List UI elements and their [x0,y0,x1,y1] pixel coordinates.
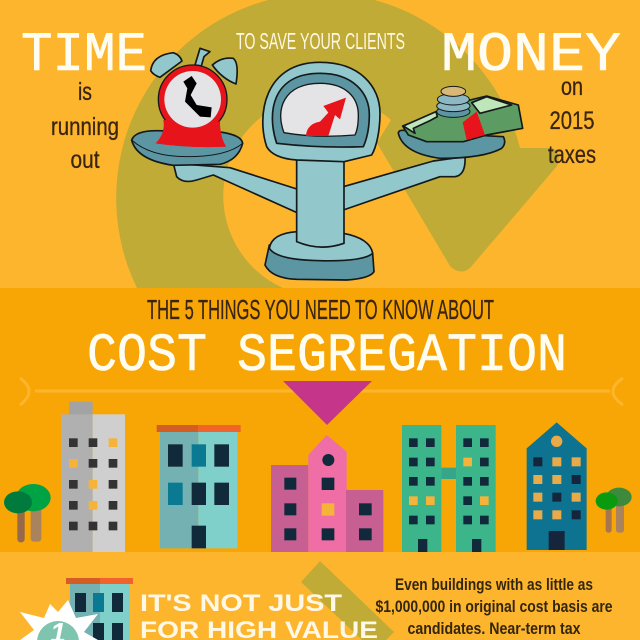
heading: money: MONEY [441,23,621,87]
panel: hero background [0,0,640,288]
bills [403,96,523,142]
scale head [263,62,380,162]
text: on 2015 taxes: 2015 [550,107,594,135]
text: is running out [51,78,119,174]
building icon item 1 [66,578,133,640]
pink building left part [271,435,347,552]
scale base [265,232,374,280]
text: item 1 description: Even buildings with as little as [395,575,593,594]
pointer triangle [283,381,372,425]
grey building [61,402,125,552]
heading: item 1 [140,590,378,640]
text: is running out: is [78,78,92,106]
text: is running out: out [70,146,100,174]
left trees [4,484,51,542]
clock bells [151,48,237,84]
teal building [157,425,241,548]
circular arrow background [116,0,559,288]
scale stem [297,157,344,247]
right trees [596,488,632,533]
text: on 2015 taxes [548,73,596,169]
heading: to save your clients: TO SAVE YOUR CLIENTS [236,28,405,54]
icon: weighing scale with clock and money [132,48,523,280]
clock hands [183,76,212,117]
heading: time: TIME [21,23,147,87]
blue gabled building [527,422,587,550]
coin stack [437,86,470,117]
bill top [403,112,437,133]
text: item 1 description [376,575,612,638]
panel: item 1 background [0,552,640,640]
left pan [132,131,243,165]
scale left arm [173,163,300,214]
clock body [156,65,227,147]
arrow shape behind item 1 [301,561,394,640]
gauge needle [306,98,346,136]
number badge 1 [20,600,98,640]
panel: cost segregation band [0,288,640,552]
red band [463,112,485,140]
clock face [164,71,221,128]
gauge surround [272,73,369,147]
text: item 1 description: candidates. Near-term tax [408,619,581,638]
right buildings and tree [322,422,632,552]
heading: item 1: IT'S NOT JUST [140,590,342,617]
green twin building [402,425,496,552]
gauge face [281,83,358,136]
left buildings and tree [4,402,347,552]
right pan [398,130,505,158]
text: is running out: running [51,113,119,141]
pink building right part [322,454,383,552]
text: on 2015 taxes: taxes [548,141,596,169]
scale right arm [343,157,465,210]
heading: cost segregation: COST SEGREGATION [87,326,567,387]
divider ornament [20,378,623,405]
text: on 2015 taxes: on [561,73,583,101]
bill top right [472,97,512,113]
